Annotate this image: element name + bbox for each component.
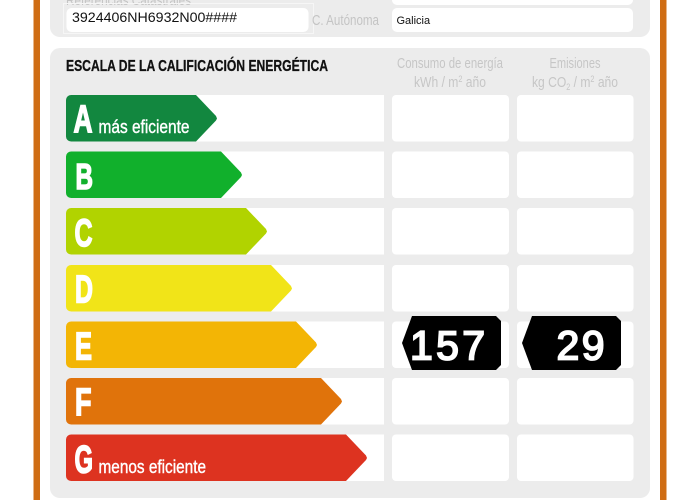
- arrow: E: [66, 322, 317, 368]
- column heading: emissions: kg CO: [532, 74, 575, 91]
- badge: emissions value: [522, 316, 621, 370]
- column heading: emissions: 2: [566, 82, 570, 92]
- arrow: E: E: [75, 326, 92, 368]
- heading: ESCALA DE LA CALIFICACIÓN ENERGÉTICA: [66, 57, 328, 75]
- field: autonomous community value: Galicia: [396, 15, 431, 27]
- field: cadastral reference: [64, 4, 314, 34]
- column heading: energy consumption: kWh / m: [414, 74, 469, 91]
- column heading: emissions: 2: [590, 74, 594, 84]
- arrow: F: [66, 378, 342, 424]
- arrow: G: menos eficiente: [98, 457, 206, 477]
- column heading: energy consumption: 2: [458, 74, 462, 84]
- column heading: energy consumption: año: [462, 74, 486, 91]
- badge: emissions value: 29: [556, 322, 604, 368]
- arrow: C: [66, 208, 267, 255]
- column heading: emissions: / m: [570, 74, 590, 91]
- arrow: G: [66, 434, 367, 482]
- arrow: B: B: [76, 156, 93, 197]
- column heading: emissions: [532, 55, 618, 92]
- badge: energy consumption value: [402, 316, 501, 370]
- field: upper value (cropped): [392, 0, 633, 5]
- arrow: A: más eficiente: [98, 117, 190, 137]
- column heading: emissions: año: [594, 74, 618, 91]
- arrow: B: [66, 152, 242, 198]
- field: autonomous community value: [392, 8, 633, 32]
- row backgrounds: [70, 95, 634, 481]
- column heading: energy consumption: [397, 55, 503, 91]
- arrow: A: [66, 95, 217, 142]
- column heading: emissions: Emisiones: [550, 55, 600, 72]
- panel: property data (cropped): [50, 0, 650, 37]
- arrow: F: F: [75, 382, 92, 424]
- label: autonomous community: C. Autónoma: [312, 12, 380, 29]
- field: cadastral reference: 3924406NH6932N00####: [72, 9, 237, 25]
- column heading: energy consumption: Consumo de energía: [397, 55, 503, 72]
- panel: energy rating scale: [50, 48, 650, 498]
- arrow: C: C: [74, 212, 92, 255]
- arrow: D: [66, 265, 292, 312]
- badge: energy consumption value: 157: [410, 322, 485, 368]
- arrow: A: A: [74, 98, 92, 142]
- arrow: G: G: [74, 438, 93, 482]
- arrow: D: D: [75, 268, 93, 312]
